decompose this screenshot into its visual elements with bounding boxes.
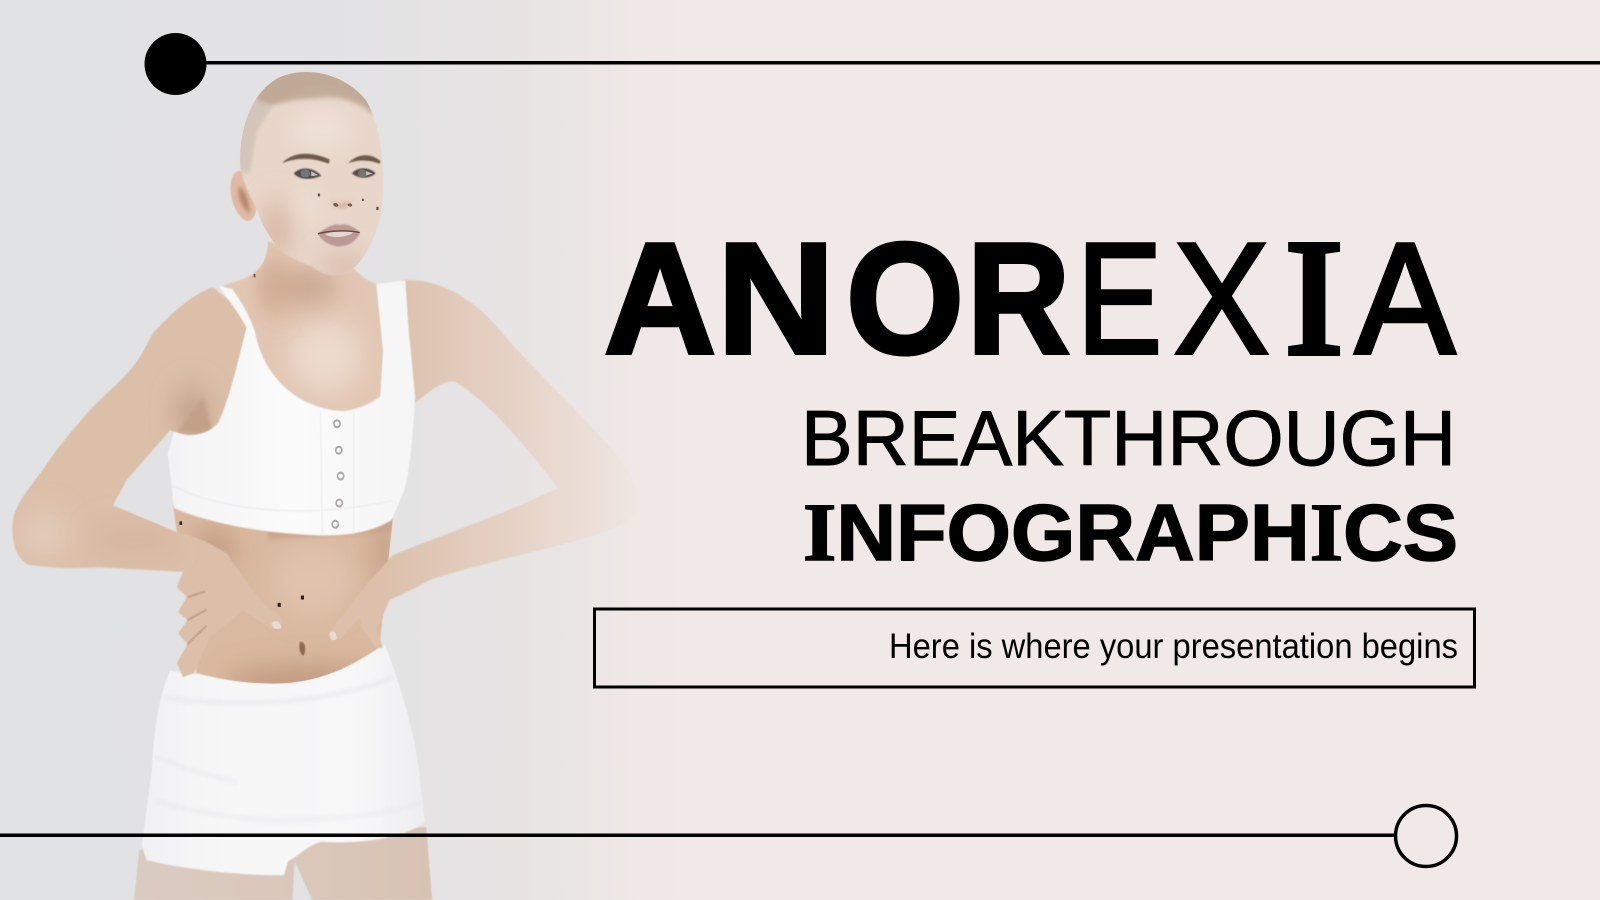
hair and shading: [237, 63, 374, 277]
head: [237, 63, 383, 277]
chest base: [223, 241, 397, 422]
body details: [179, 521, 337, 656]
right eye: [352, 168, 376, 178]
finger lines: [187, 591, 206, 644]
title: ANOREXIA: X: [1174, 211, 1269, 387]
left eye: [294, 168, 321, 179]
mouth line: [318, 231, 360, 234]
title: ANOREXIA: A: [1355, 211, 1456, 387]
bottom rule: [0, 834, 1396, 837]
crop top: [168, 280, 415, 535]
subtitle: INFOGRAPHICS: INFOGRAPHICS: [803, 486, 1458, 578]
shorts folds: [154, 757, 422, 820]
crop top placket: [171, 411, 393, 534]
tagline box: [594, 609, 1474, 687]
chest shading: [261, 258, 362, 390]
torso base: [173, 505, 393, 683]
lips: [318, 224, 360, 246]
fingernails: [271, 621, 337, 640]
tagline text: Here is where your presentation begins: [889, 627, 1458, 666]
right arm and hand: [328, 280, 638, 648]
navel: [299, 642, 305, 656]
ear inner shadow: [238, 187, 250, 214]
shorts: [142, 644, 425, 875]
bottom hollow circle: [1396, 806, 1456, 866]
torso: [172, 505, 394, 684]
top rule: [204, 61, 1600, 64]
nostrils: [333, 203, 352, 207]
title: ANOREXIA: E: [1077, 211, 1162, 387]
box outline: [594, 609, 1474, 687]
shorts waistband: [166, 678, 393, 703]
teeth: [325, 231, 354, 237]
title: ANOREXIA: N: [717, 211, 835, 387]
top solid circle: [144, 33, 206, 95]
torso shading: [194, 519, 392, 684]
arm silhouette: [13, 287, 282, 677]
photo: woman in white underwear: [13, 63, 638, 900]
face moles: [254, 194, 379, 277]
skull and face: [240, 72, 383, 275]
left arm and hand: [13, 287, 282, 677]
subtitle: BREAKTHROUGH: BREAKTHROUGH: [801, 394, 1456, 482]
ear: [231, 171, 257, 221]
title: ANOREXIA: I: [1285, 206, 1343, 389]
body moles: [179, 521, 304, 607]
title: ANOREXIA: A: [604, 211, 716, 387]
title: ANOREXIA: O: [846, 211, 964, 387]
arm shading: [20, 388, 213, 554]
neck and chest: [223, 240, 384, 412]
legs: [134, 827, 432, 900]
title: ANOREXIA: R: [967, 211, 1070, 387]
crop top buttons: [332, 420, 344, 528]
nose: [331, 199, 354, 207]
brows: [282, 154, 381, 164]
